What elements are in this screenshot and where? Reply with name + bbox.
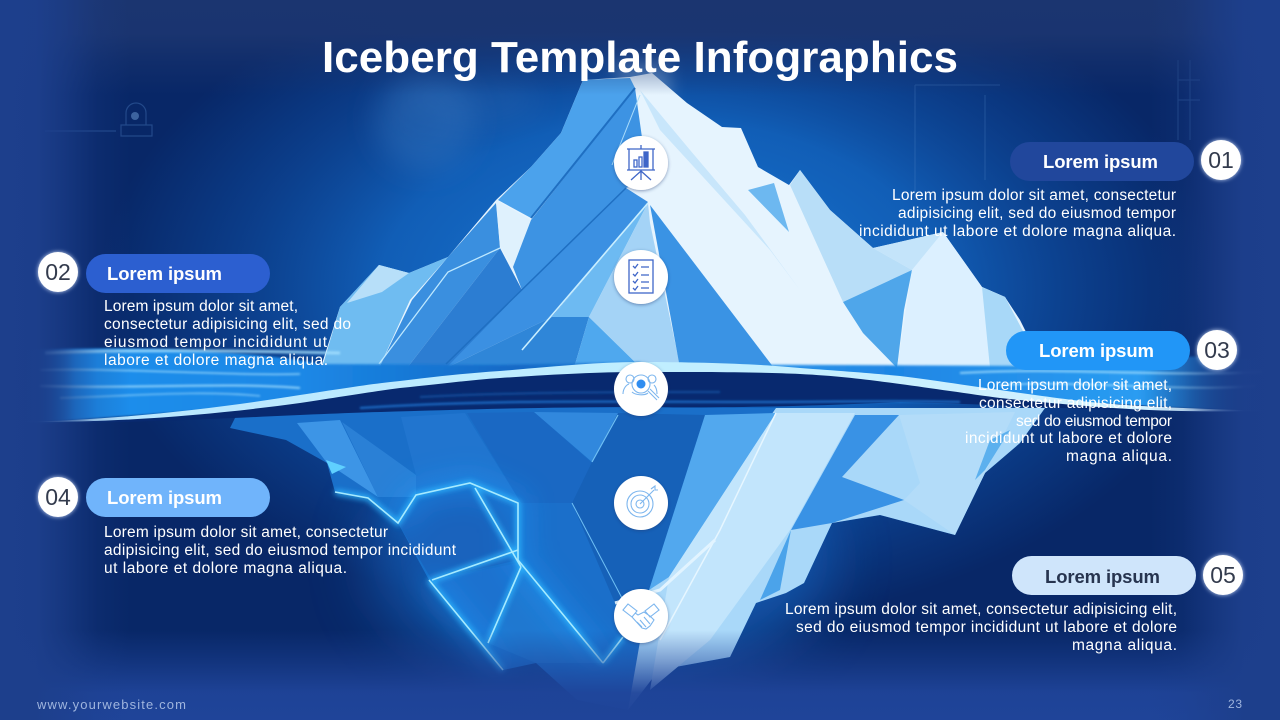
callout 01: adipisicing elit, sed do eiusmod tempor: [898, 205, 1176, 222]
pill 05: [1012, 556, 1196, 595]
pill 04: [86, 478, 270, 517]
callout 03: magna aliqua.: [1066, 448, 1172, 465]
water surface: [20, 348, 1268, 425]
callout 04: 04: [45, 484, 71, 510]
callout 03: sed do eiusmod tempor: [1016, 413, 1172, 430]
callout 02: Lorem ipsum dolor sit amet,: [104, 298, 298, 315]
pill 03: [1006, 331, 1190, 370]
callout 01: 01: [1208, 147, 1234, 173]
callout 02: [38, 252, 351, 369]
callout 01: incididunt ut labore et dolore magna aliqua.: [859, 223, 1176, 240]
callout 05: 05: [1210, 562, 1236, 588]
iceberg above water: [320, 60, 1045, 370]
footer website: www.yourwebsite.com: [36, 697, 186, 712]
callout 04: Lorem ipsum dolor sit amet, consectetur: [104, 524, 388, 541]
callout 05: magna aliqua.: [1072, 637, 1177, 654]
callout 01: [859, 140, 1241, 240]
callout 01: Lorem ipsum dolor sit amet, consectetur: [892, 187, 1176, 204]
callout 05: [785, 555, 1243, 654]
callout 05: Lorem ipsum dolor sit amet, consectetur adipisicing elit,: [785, 601, 1177, 618]
callout 04: [38, 477, 457, 577]
iceberg below water: [230, 408, 1045, 710]
icon: handshake: [614, 589, 668, 643]
right edge fade: [1150, 0, 1280, 720]
left edge fade: [0, 0, 130, 720]
callout 05: Lorem ipsum: [1045, 566, 1160, 587]
glowing cracks: [326, 460, 623, 670]
callout 02: Lorem ipsum: [107, 263, 222, 284]
title: Iceberg Template Infographics: [322, 33, 958, 82]
page number: 23: [1228, 697, 1242, 711]
callout 05: sed do eiusmod tempor incididunt ut labore et dolore: [796, 619, 1177, 636]
callout 02: 02: [45, 259, 71, 285]
icon: target: [614, 476, 668, 530]
callout 02: labore et dolore magna aliqua.: [104, 352, 328, 369]
icon: checklist: [614, 250, 668, 304]
bottom edge fade: [0, 630, 1280, 720]
callout 03: incididunt ut labore et dolore: [965, 430, 1172, 447]
callout 01: Lorem ipsum: [1043, 151, 1158, 172]
callout 04: adipisicing elit, sed do eiusmod tempor incididunt: [104, 542, 457, 559]
callout 03: 03: [1204, 337, 1230, 363]
callout 03: consectetur adipisicing elit,: [979, 395, 1172, 412]
callout 03: Lorem ipsum dolor sit amet,: [978, 377, 1172, 394]
pill 02: [86, 254, 270, 293]
icon: team search: [614, 362, 668, 416]
pill 01: [1010, 142, 1194, 181]
callout 02: eiusmod tempor incididunt ut: [104, 334, 328, 351]
top edge fade: [0, 0, 1280, 95]
callout 02: consectetur adipisicing elit, sed do: [104, 316, 351, 333]
icon: presentation board: [614, 136, 668, 190]
callout 04: Lorem ipsum: [107, 487, 222, 508]
callout 03: Lorem ipsum: [1039, 340, 1154, 361]
callout 04: ut labore et dolore magna aliqua.: [104, 560, 347, 577]
callout 03: [965, 330, 1237, 465]
